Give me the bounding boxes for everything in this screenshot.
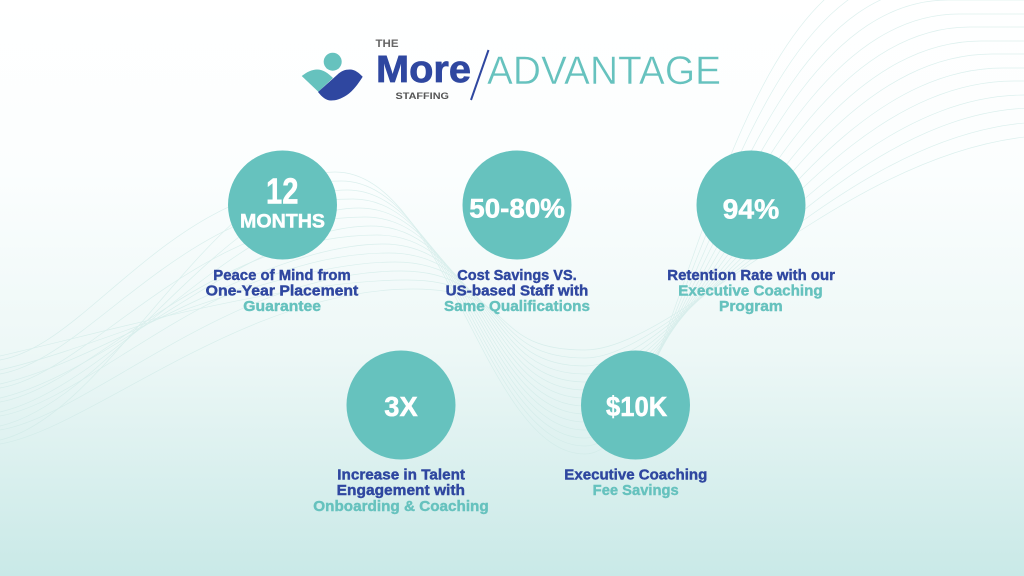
description: Executive Coaching: [678, 284, 823, 300]
description: Program: [719, 299, 783, 315]
logo wordmark: [376, 38, 471, 102]
description: Same Qualifications: [444, 299, 590, 315]
value: 94%: [723, 193, 779, 224]
stat: 50-80%: [444, 150, 590, 315]
stat: 94%: [667, 150, 835, 315]
description: [564, 468, 707, 499]
description: [313, 468, 489, 515]
description: [444, 268, 590, 315]
description: [206, 268, 358, 315]
stat: $10K: [564, 350, 707, 499]
value: MONTHS: [240, 211, 325, 233]
circle badge: [346, 350, 456, 460]
description: Fee Savings: [593, 483, 679, 499]
icon: More Staffing logo mark: [302, 53, 363, 100]
description: Executive Coaching: [564, 468, 707, 484]
description: Retention Rate with our: [667, 268, 835, 284]
value: [240, 170, 325, 233]
stat: 3X: [313, 350, 489, 515]
logo wordmark: STAFFING: [396, 91, 449, 102]
description: Onboarding & Coaching: [313, 499, 489, 515]
circle badge: [228, 150, 337, 260]
description: Peace of Mind from: [213, 268, 351, 284]
value: 50-80%: [469, 194, 565, 224]
value: 3X: [384, 391, 418, 422]
circle badge: [581, 350, 690, 460]
description: Cost Savings VS.: [457, 268, 577, 284]
stat: 12 months: [206, 150, 358, 315]
description: One-Year Placement: [206, 284, 358, 300]
logo wordmark: More: [376, 49, 471, 91]
description: Engagement with: [337, 483, 465, 499]
logo wordmark: THE: [376, 38, 398, 50]
description: US-based Staff with: [446, 284, 588, 300]
description: [667, 268, 835, 315]
value: $10K: [606, 391, 667, 422]
circle badge: [462, 150, 572, 260]
header logo and title: [302, 38, 721, 102]
value: 12: [266, 170, 298, 212]
title: ADVANTAGE: ADVANTAGE: [487, 49, 721, 93]
slash divider: [471, 50, 488, 100]
description: Guarantee: [243, 299, 321, 315]
description: Increase in Talent: [337, 468, 465, 484]
circle badge: [696, 150, 806, 260]
